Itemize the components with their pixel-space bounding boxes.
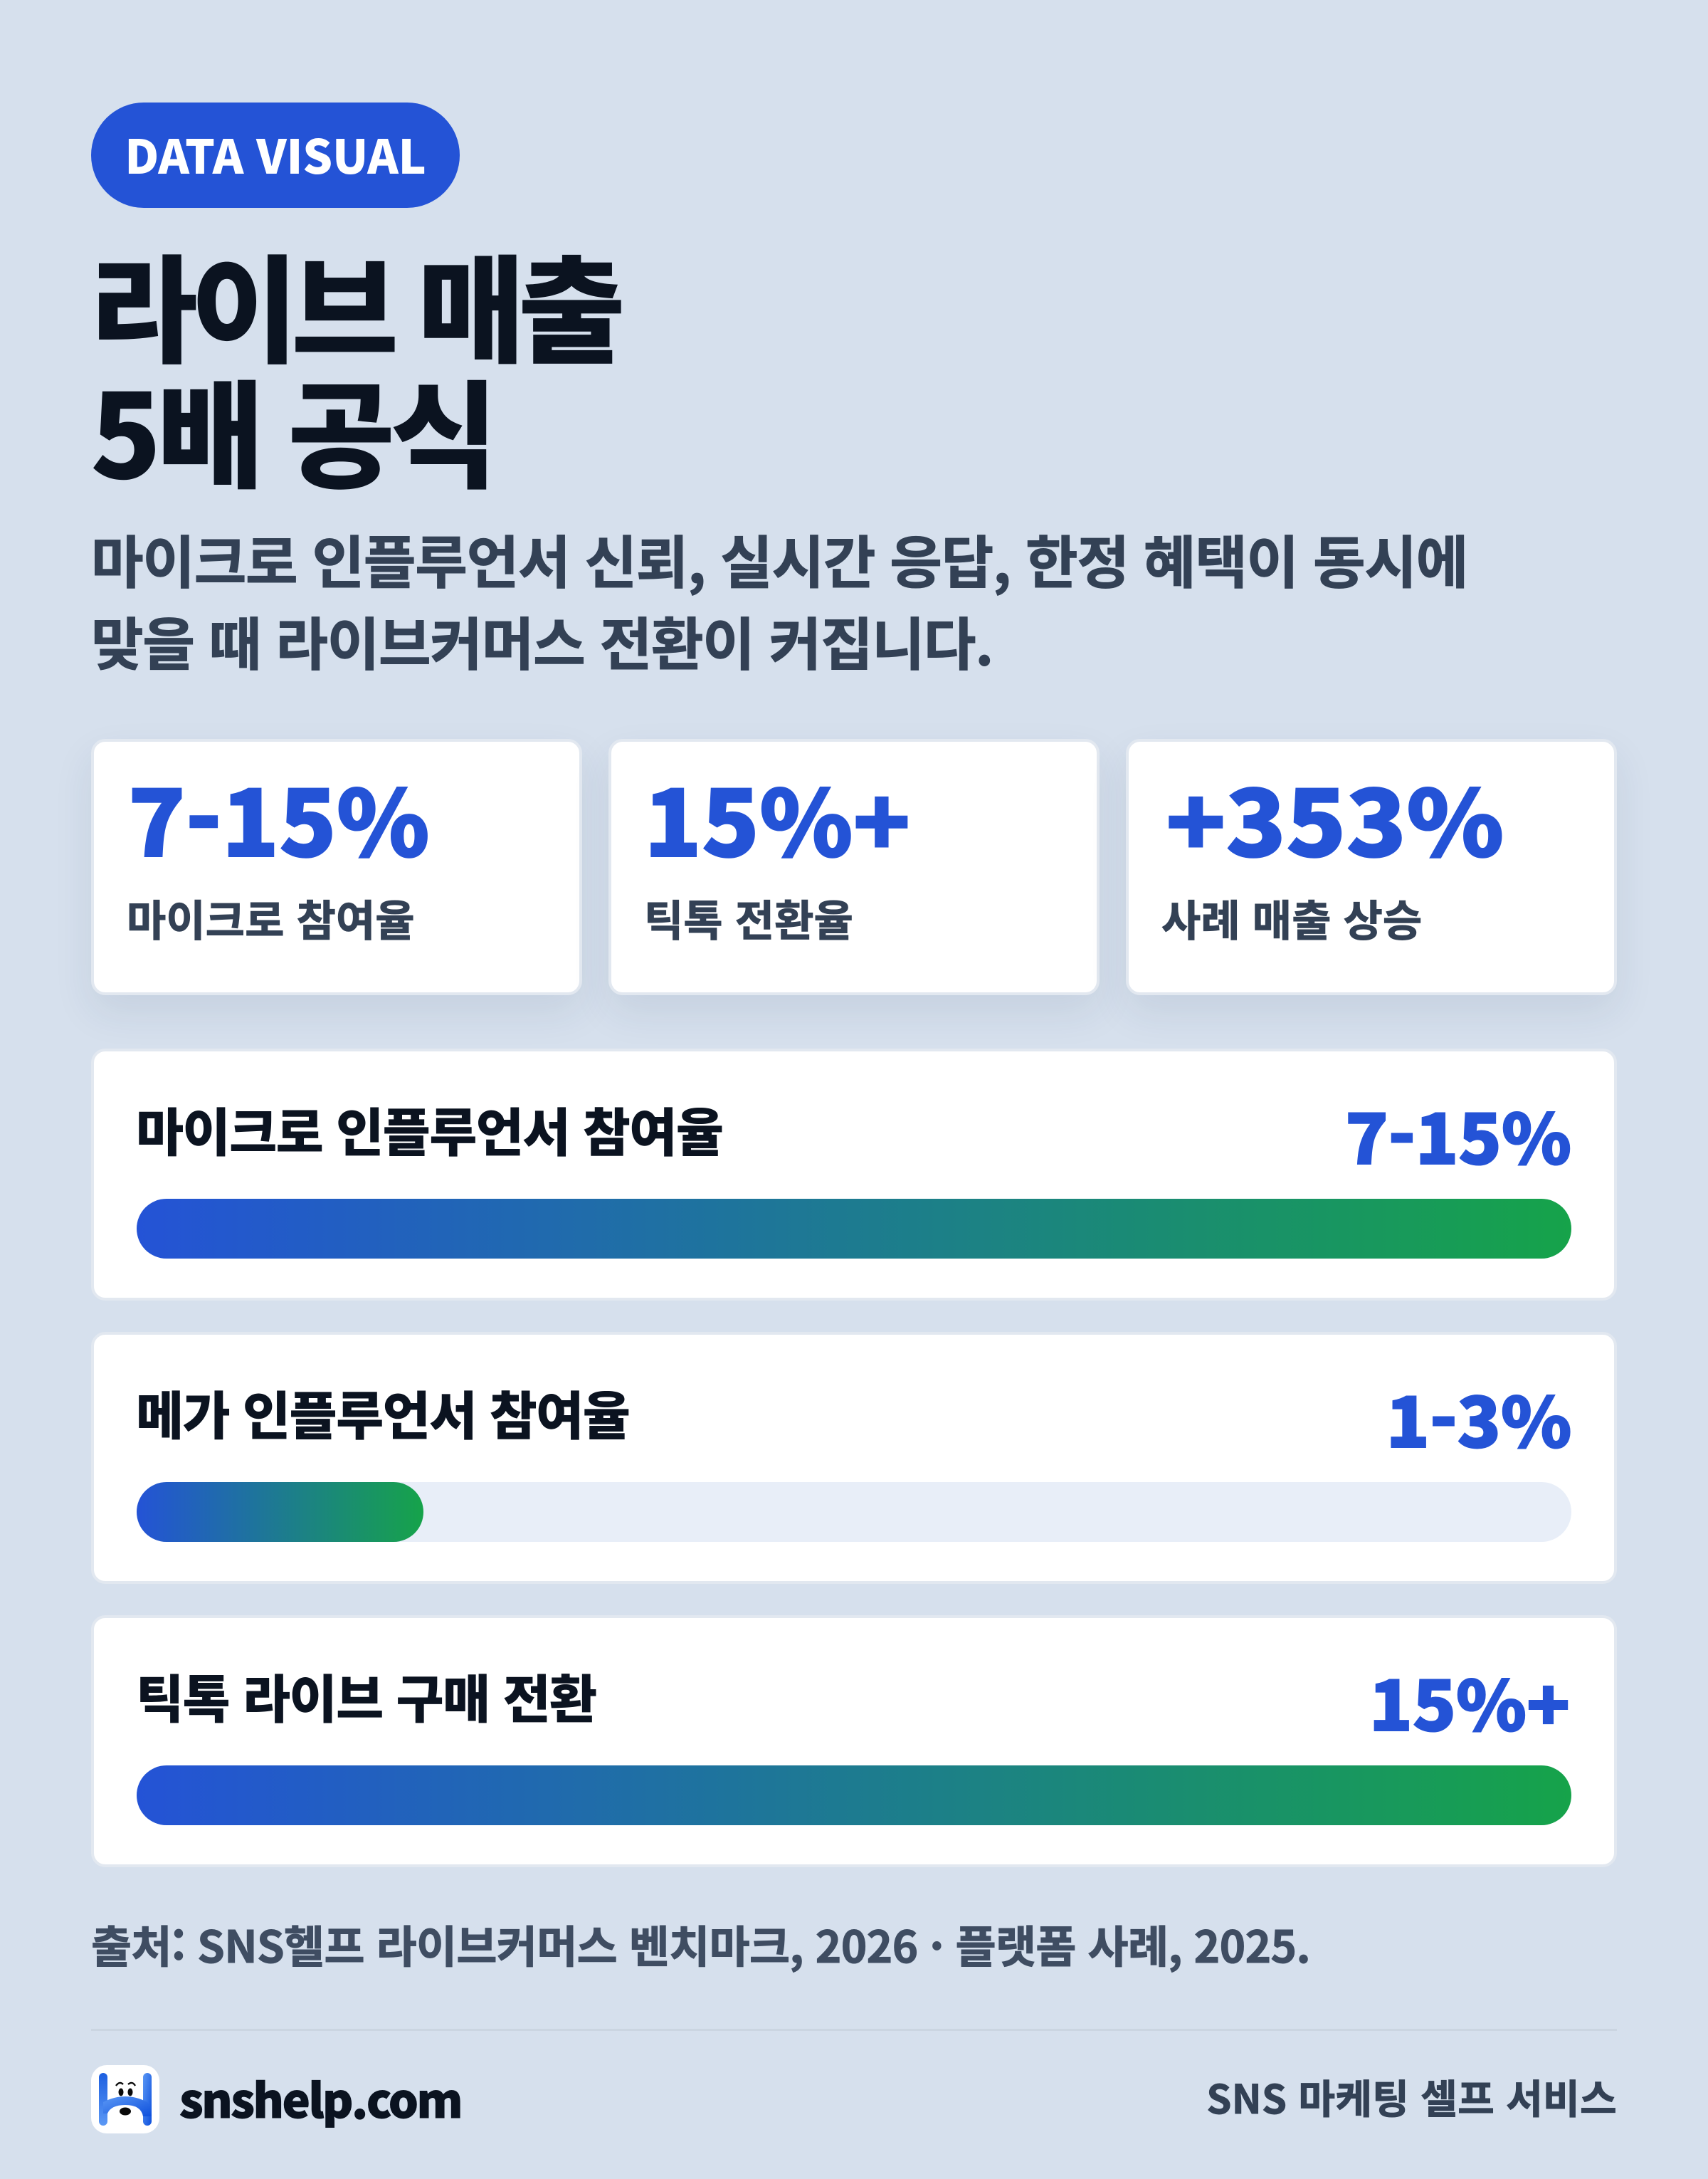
stat label: 틱톡 전환율 — [644, 887, 853, 949]
stat label: 사례 매출 상승 — [1161, 887, 1422, 949]
bar label: 마이크로 인플루언서 참여율 — [136, 1091, 722, 1167]
stat card: 사례 매출 상승 — [1126, 739, 1617, 995]
bar fill 100% — [137, 1199, 1571, 1259]
bar track full — [137, 1199, 1571, 1259]
title: 라이브 매출 — [90, 219, 618, 387]
panel: 틱톡 라이브 구매 전환 — [91, 1615, 1617, 1867]
bar fill 20% — [137, 1482, 423, 1542]
stat card: 틱톡 전환율 — [608, 739, 1100, 995]
title: 5배 공식 — [90, 344, 493, 513]
panel: 마이크로 인플루언서 참여율 — [91, 1049, 1617, 1301]
stat value: +353% — [1166, 751, 1504, 883]
bar label: 틱톡 라이브 구매 전환 — [136, 1658, 596, 1733]
stat value: 7-15% — [128, 751, 430, 883]
badge: DATA VISUAL — [91, 103, 460, 208]
tagline: SNS 마케팅 셀프 서비스 — [1206, 2068, 1617, 2126]
stat label: 마이크로 참여율 — [127, 887, 415, 949]
bar value: 1-3% — [1386, 1368, 1571, 1467]
bar label: 메가 인플루언서 참여율 — [136, 1375, 629, 1450]
bar value: 7-15% — [1345, 1085, 1571, 1184]
subtitle: 마이크로 인플루언서 신뢰, 실시간 응답, 한정 혜택이 동시에 — [91, 518, 1467, 600]
bar value: 15%+ — [1369, 1652, 1570, 1750]
subtitle: 맞을 때 라이브커머스 전환이 커집니다. — [91, 599, 993, 682]
badge: DATA VISUAL: DATA VISUAL — [125, 120, 426, 188]
stat card: 마이크로 참여율 — [91, 739, 582, 995]
source note: 출처: SNS헬프 라이브커머스 벤치마크, 2026 · 플랫폼 사례, 2025. — [91, 1911, 1310, 1975]
panel: 메가 인플루언서 참여율 — [91, 1332, 1617, 1584]
subtitle — [91, 518, 1467, 682]
brand name: snshelp.com — [179, 2064, 461, 2132]
stat value: 15%+ — [644, 751, 910, 883]
title — [90, 219, 621, 513]
bar track full — [137, 1765, 1571, 1825]
bar fill 100% — [137, 1765, 1571, 1825]
icon: snshelp logo — [91, 2065, 159, 2133]
bar track — [137, 1482, 1571, 1542]
